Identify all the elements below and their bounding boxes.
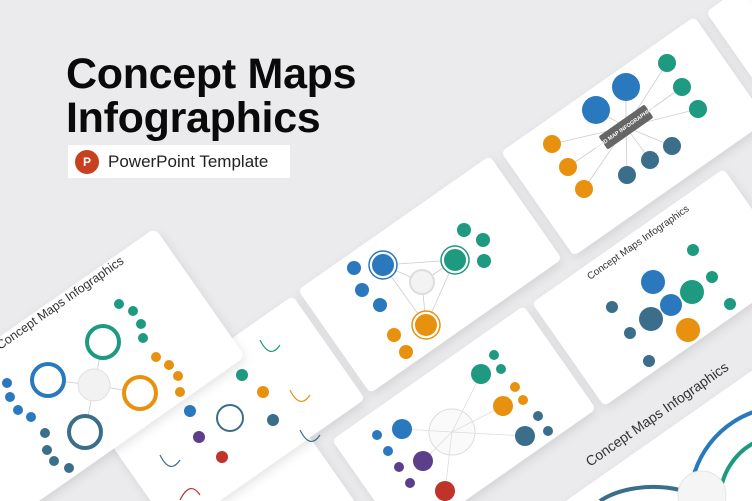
slide: concept maps right: [532, 169, 752, 406]
slide: bottom right: Concept Maps Infographics: [583, 359, 731, 469]
title: Concept Maps: [66, 50, 356, 98]
slide: big left concept map: [0, 228, 245, 501]
icon: powerpoint: P: [83, 155, 91, 169]
slide: mind map infographic: [501, 17, 752, 256]
slide: concept maps right: Concept Maps Infographics: [585, 204, 691, 282]
title: [66, 50, 356, 142]
title: Infographics: [66, 94, 320, 142]
icon: powerpoint: [75, 150, 99, 174]
slide: bottom partial: [110, 426, 374, 501]
slide: star network bottom: [332, 306, 596, 501]
slide: bottom right: [560, 333, 752, 501]
subtitle text: PowerPoint Template: [108, 152, 268, 171]
slide: curves middle: [101, 296, 365, 501]
slide: top right partial: [706, 0, 752, 115]
slide: mind map infographic: MIND MAP INFOGRAPHICS: [594, 105, 657, 151]
slide: circles network top middle: [298, 156, 562, 393]
subtitle pill: [68, 145, 290, 178]
